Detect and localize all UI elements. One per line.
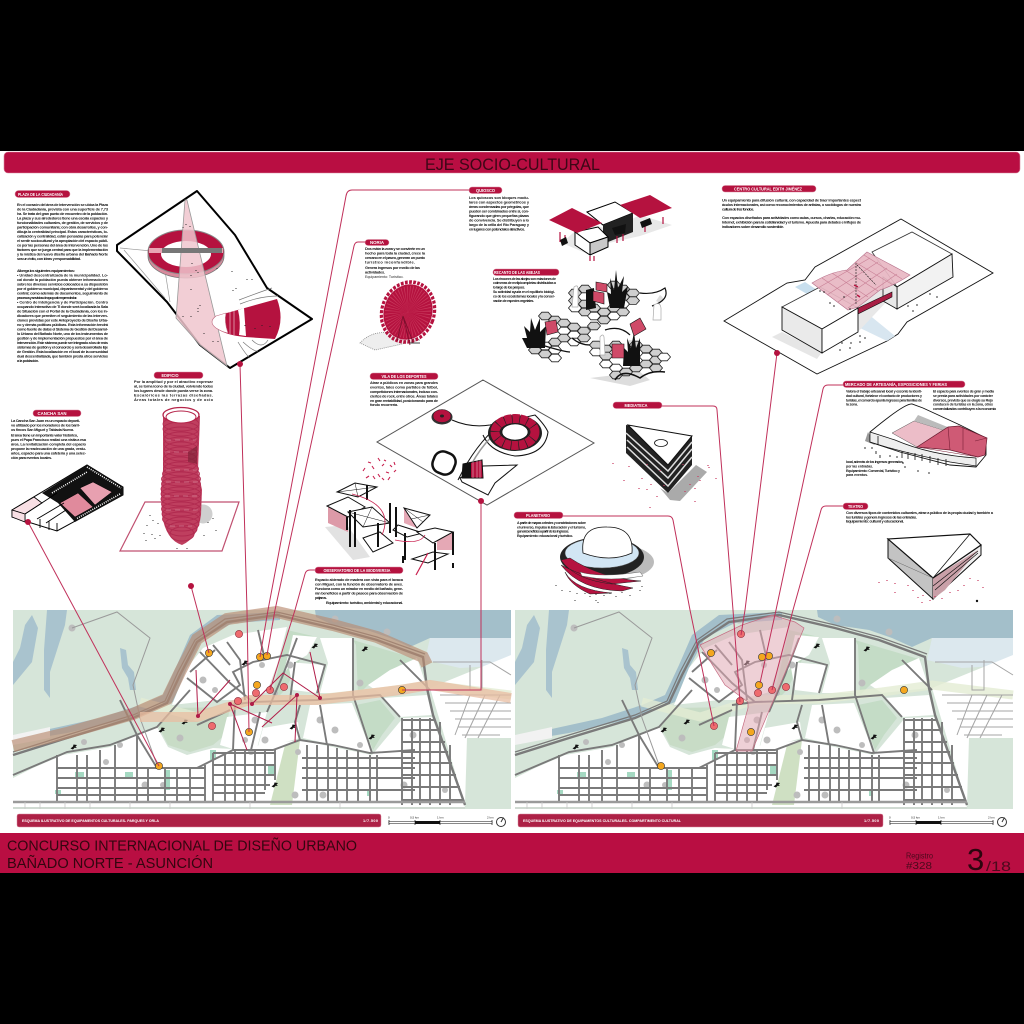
text: noria: turístico inconfundible.: [365, 260, 415, 264]
text: plaza: como fuente de datos el Sistema de Gestión del Desarrol-: [17, 326, 109, 332]
caption bar: parques y orla: [17, 814, 381, 827]
scale bar: right: 0,5 km: [911, 816, 921, 820]
text: recanto: lo largo de los parques.: [493, 286, 525, 290]
text: observatorio: Equipamiento: turístico, ambiental y educacional.: [326, 600, 403, 605]
text: observatorio: ran beneficios a partir de paseos para observación de: [315, 590, 404, 596]
text: noria: [365, 246, 426, 279]
text: quiosco: pueden ser combinados entre sí, con-: [469, 208, 530, 214]
panel: recanto de las abejas: [493, 269, 670, 386]
label: edificio: EDIFICIO: [162, 373, 179, 378]
text: quiosco: en lugares con potenciales atractivos.: [469, 226, 525, 232]
text: plaza: sea un éxito, con ideas y responsabilidad.: [17, 256, 81, 261]
map: compartimento cultural: [515, 610, 1013, 809]
text: mercado: local, además de los ingresos generados: [846, 460, 903, 464]
text: quiosco: de convivencia. Se distribuyen a lo: [469, 218, 530, 222]
footer band: BAÑADO NORTE - ASUNCIÓN: [7, 855, 213, 872]
text: plaza: [17, 202, 109, 363]
text: recanto: [493, 277, 557, 303]
label: planetario: PLANETARIO: [526, 513, 551, 518]
text: quiosco: [469, 195, 530, 232]
text: plaza: de la Ciudadanía, prevista con una superficie de 7,73: [17, 206, 109, 212]
text: cancha san: [11, 418, 87, 460]
text: mercado: dad cultural, fortalece el contacto de productores y: [846, 394, 922, 398]
text: vila: Atrae a públicos en zonas para grandes: [370, 380, 438, 385]
text: recanto: vación de especies vegetales.: [493, 299, 534, 303]
drawing: mercado: [865, 404, 987, 474]
text: edificio: Áreas totales de negocios y de ocio: [134, 397, 214, 402]
caption bar: compartimento cultural: [518, 814, 883, 827]
text: centro cultural: Internet, exhibición para la cotidianidad y el turismo. Apuesta para debates e influjos de: [722, 220, 862, 224]
text: plaza: La plaza y sus alrededores tiene una escala espacios y: [17, 216, 109, 220]
text: plaza: calización y centralidad, están pensadas para potenciar: [17, 234, 108, 238]
text: mercado: la zona.: [846, 402, 858, 406]
drawing: noria wheel: [360, 274, 443, 350]
text: planetario: el universo, impulsa la Educación y el turismo,: [517, 525, 586, 529]
text: cancha san: El área tiene un importante valor histórico,: [11, 432, 78, 438]
text: quiosco: lares con aspectos geométricos y: [469, 200, 530, 204]
text: cancha san: arios, espacio para una cafetería y una selec-: [11, 450, 87, 456]
text: vila: [370, 380, 439, 407]
text: mercado: Valora el trabajo artesanal local y esconte la identi-: [846, 390, 923, 394]
scale bar: right: 2 km: [988, 816, 995, 820]
text: mercado: El espacio para eventos de gran y media: [933, 390, 995, 394]
panel: quiosco: [469, 187, 672, 261]
label: vila: VILA DE LOS DEPORTES: [382, 374, 427, 379]
text: observatorio: Espacio abierado de madera con vista para el lavaca: [315, 577, 404, 582]
label: observatorio: OBSERVATORIO DE LA BIODIVERSIA: [324, 568, 391, 573]
label: recanto: [493, 269, 559, 276]
text: plaza: funcionalidades culturales, de gestión, de servicios y de: [17, 220, 109, 225]
label: teatro: TEATRO: [848, 504, 864, 509]
text: edificio: Por la amplitud y por el atractivo expresar: [134, 379, 213, 384]
text: recanto: co de los ecosistemas locales y la conser-: [493, 294, 556, 298]
text: mercado: Equipamiento: Comercial, Turístico y: [846, 469, 900, 473]
panel: centro cultural edith jimenez: [722, 186, 993, 374]
text: plaza: dual descentralizada, que también presta otros servicios: [17, 354, 108, 358]
text: mercado: por las entradas.: [846, 464, 873, 468]
scale bar: left: 1 km: [437, 816, 444, 820]
label: mediateca: MEDIATECA: [624, 403, 648, 408]
scale bar: left: [388, 816, 506, 826]
text: teatro: Con diversos tipos de contenidos culturales, atrae a público de la propia ciudad y también a: [846, 510, 994, 515]
drawing: cancha san: [12, 465, 123, 531]
text: plaza: lo Urbano del Bañado Norte, uno de los instrumentos de: [17, 331, 109, 336]
text: centro cultural: Con espacios diseñados para actividades como aulas, cursos, charlas, educación mu-: [722, 215, 862, 220]
scale bar: right: 1 km: [938, 816, 945, 820]
text: edificio: los lugares desde donde pueda verse la zona.: [134, 388, 213, 393]
dot: edificio callout: [188, 583, 194, 589]
text: centro cultural: [722, 198, 862, 229]
text: observatorio: [315, 577, 404, 605]
label: quiosco: QUIOSCO: [476, 188, 496, 193]
text: plaza: intervención. Este sistema puede ser integrado a los de más: [17, 340, 108, 345]
drawing: centro cultural: [724, 219, 993, 374]
text: plaza: el sentir sociocultural y la apropiación del espacio públi-: [17, 238, 109, 243]
text: noria: actividades.: [365, 270, 385, 274]
drawing: plaza: [117, 191, 312, 368]
text: mercado: conducen de turistas en la zona, otros: [933, 402, 993, 406]
text: planetario: Equipamiento: educacional y turístico.: [517, 534, 573, 538]
map: parques y orla: [13, 610, 511, 809]
text: plaza: ciones previstas por este Anteproyecto de Diseño Urba-: [17, 318, 109, 322]
panel: plaza de la ciudadania: [15, 190, 312, 368]
drawing: edificio tower: [120, 408, 239, 551]
text: vila: competiciones internacionales, incluso con-: [370, 389, 439, 394]
drawing: vila site plan: [377, 380, 594, 505]
text: mercado: [846, 390, 997, 477]
drawing: quiosco: [549, 195, 672, 261]
drawing: observatorio pavilions: [325, 458, 453, 575]
text: plaza: dibuja la centralidad principal. Estas características, lo-: [17, 229, 109, 234]
label: mercado: MERCADO DE ARTESANÍA, EXPOSICIONES Y FERIAS: [845, 382, 947, 387]
white sheet: [0, 151, 1024, 833]
scale bar: left: 0: [388, 816, 390, 820]
text: vila: eventos, tales como partidos de fútbol,: [370, 384, 438, 390]
text: cancha san: área. La revitalización completa del espacio: [11, 442, 87, 446]
panel: mediateca: [613, 402, 716, 508]
text: vila: en gran rentabilidad, posicionando para de: [370, 398, 439, 403]
text: plaza: a la población.: [17, 358, 39, 363]
text: noria: cercano en el paseo, generan un punto: [365, 255, 426, 260]
label: noria: NORIA: [370, 240, 384, 245]
panel: cancha san: [11, 410, 123, 531]
text: plaza: gestión y de implementación propuestos por el área de: [17, 336, 109, 340]
caption bar: parques y orla: ESQUEMA ILUSTRATIVO DE EQUIPAMENTOS CULTURALES- PARQUES Y ORLA: [22, 819, 159, 823]
text: plaza: cal donde la población pueda obtener informaciones: [17, 277, 108, 282]
scale bar: left: 2 km: [487, 816, 494, 820]
text: plaza: participación comunitaria; con obra desarrollos, y con-: [17, 224, 109, 230]
label: quiosco: [469, 187, 502, 194]
text: observatorio: pájaros.: [315, 595, 327, 600]
text: recanto: colmenas de melipicompletas distribuidas a: [493, 281, 557, 285]
footer band: #328: [906, 861, 933, 872]
panel: planetario: [514, 512, 654, 603]
text: plaza: sistemas de gestión y el consorcio y será desarrollado Eje: [17, 344, 109, 350]
text: cancha san: os fincos San Miguel y Tablada Nueva.: [11, 427, 74, 432]
text: plaza: dicadores que permiten el seguimiento de las interven-: [17, 313, 109, 318]
scale bar: left: 0,5 km: [410, 816, 420, 820]
text: centro cultural: cultura de tres fondos.: [722, 206, 754, 212]
scale bar: right: 0: [889, 816, 891, 820]
footer band: CONCURSO INTERNACIONAL DE DISEÑO URBANO: [7, 838, 357, 854]
label: centro cultural: [722, 186, 816, 192]
text: teatro: [846, 510, 994, 524]
panel: vila de los deportes: [370, 373, 594, 505]
text: quiosco: largo de la orilla del Río Paraguay y: [469, 222, 530, 227]
label: vila: [370, 373, 438, 380]
text: plaza: de Gestión. Esta localización en el local de la comunidad: [17, 349, 109, 354]
text: plaza: ha. Se trata del gran punto de encuentro de la población.: [17, 211, 108, 216]
text: plaza: factores que se juega central para que la implementación: [17, 247, 109, 252]
text: planetario: [517, 521, 586, 538]
footer band: Registro: [906, 852, 933, 860]
text: quiosco: figurando que giren pequeñas plazas: [469, 213, 529, 218]
title bar: [4, 152, 1020, 174]
label: plaza: PLAZA DE LA CIUDADANÍA: [18, 192, 63, 197]
text: recanto: Los rincones de las abejas son estaciones de: [493, 277, 556, 281]
text: cancha san: pues el Papa Francisco realizó una visita a esa: [11, 437, 87, 442]
drawing: planetario dome: [556, 527, 654, 603]
text: noria: Equipamiento: Turístico.: [365, 275, 404, 279]
scale bar: right: [889, 816, 1006, 826]
text: plaza: no y demás políticas públicas. Esta información tendrá: [17, 322, 109, 327]
title bar: EJE SOCIO-CULTURAL: [425, 155, 600, 174]
text: plaza: procesos y servicios de apoyo al emprendedor.: [17, 295, 77, 300]
text: mercado: se presta para actividades por carácter: [933, 394, 994, 398]
caption bar: parques y orla: 1/7.500: [363, 819, 378, 823]
label: edificio: [154, 372, 203, 378]
label: recanto: RECANTO DE LAS ABEJAS: [494, 270, 540, 275]
text: plaza: por el gobierno municipal, departamental y del gobierno: [17, 286, 109, 291]
text: noria: hecho para toda la ciudad, crece la: [365, 250, 426, 256]
label: cancha san: CANCHA SAN: [38, 411, 67, 416]
label: plaza: [15, 190, 70, 198]
text: observatorio: con Miguel, con la función de observatorio de aves.: [315, 582, 403, 586]
label: mercado: [843, 381, 965, 388]
footer band: [0, 833, 1024, 877]
text: edificio: al, se torna icono de la ciudad, volviendo todos: [134, 384, 213, 388]
text: mercado: para eventos.: [846, 473, 868, 477]
dot: cancha callout: [25, 519, 31, 525]
text: mercado: comercializadas contribuyen a la economía: [933, 407, 997, 411]
text: noria: Genera ingresos por medio de las: [365, 265, 420, 270]
text: quiosco: áreas condensadas por pérgolas, que: [469, 204, 530, 209]
label: centro cultural: CENTRO CULTURAL EDITH JIMÉNEZ: [734, 186, 802, 192]
panel: mercado de artesania: [843, 381, 997, 477]
text: mercado: turistas, el comercio apunta ingresos para familias de: [846, 398, 922, 402]
text: cancha san: propone la readecuación de una grada, vestu-: [11, 446, 87, 451]
text: plaza: y la mística del nuevo diseño urbano del Bañado Norte: [17, 252, 109, 256]
text: plaza: • Unidad descentralizada de la municipalidad. Lo-: [17, 272, 109, 278]
dot: vila callout: [478, 498, 484, 504]
text: vila: fondo recorrería.: [370, 402, 398, 407]
text: planetario: A partir de mapas celestes y constelaciones sobre: [517, 521, 586, 525]
text: edificio: Escalóricos las terrazas diseñadas.: [134, 392, 213, 398]
caption bar: compartimento cultural: 1/7.500: [864, 819, 879, 823]
text: plaza: central; como además de documentos, seguimiento de: [17, 290, 109, 296]
text: quiosco: Los quioscos son bloques modu-: [469, 195, 530, 200]
text: plaza: co por las personas del área de intervención. Uno de los: [17, 242, 108, 248]
footer band: /18: [986, 858, 1011, 874]
caption bar: compartimento cultural: ESQUEMA ILUSTRATIVO DE EQUIPAMENTOS CULTURALES- COMPARTIMENTO CULTURAL: [523, 819, 682, 823]
dot: plaza callout: [237, 361, 243, 367]
label: observatorio: [315, 567, 403, 574]
text: mercado: diversos, previsto que se elogie su Rojo: [933, 398, 994, 402]
text: centro cultural: áculos internacionales, así como reconocimientos de artistas, o sociólogos de nuestra: [722, 202, 862, 207]
text: centro cultural: indicadores sobre desarrollo sostenible.: [722, 224, 784, 229]
footer band: 3: [967, 842, 984, 877]
drawing: teatro: [879, 534, 983, 603]
text: teatro: los turistas y genera ingresos de las entradas.: [846, 514, 917, 520]
text: plaza: de Situación con el Portal de la Ciudadanía, con los in-: [17, 308, 109, 314]
text: cancha san: vo utilizado por los moradores de los barri-: [11, 422, 81, 428]
text: cancha san: ción para eventos locales.: [11, 455, 52, 460]
text: noria: Dos están la zona y se convierte en un: [365, 246, 426, 251]
panel: observatorio de la biodiversidad: [315, 458, 453, 605]
text: plaza: En el corazón del área de intervención se ubica la Plaza: [17, 202, 109, 207]
text: edificio: [134, 379, 214, 402]
panel: edificio: [120, 372, 239, 551]
dot: centro callout: [774, 350, 780, 356]
panel: noria: [360, 240, 443, 350]
panel: teatro: [843, 503, 994, 603]
text: plaza: Alberga los siguientes equipamientos:: [17, 268, 75, 273]
text: plaza: ocupando interactivo de TI donde será localizada la Sala: [17, 304, 109, 309]
text: centro cultural: Un equipamiento para difusión cultural, con capacidad de traer importantes espect: [722, 198, 862, 202]
callout lines: [28, 190, 843, 766]
drawing: mediateca block: [613, 425, 716, 508]
drawing: recanto hexagons: [522, 270, 670, 386]
text: teatro: Equipamiento: cultural y educacional.: [846, 518, 904, 524]
label: teatro: [843, 503, 868, 510]
text: plaza: • Centro de Inteligencia y de Participación. Centro: [17, 300, 109, 304]
text: plaza: sobre los diversos servicios colocados a su disposición: [17, 282, 109, 286]
text: recanto: Su actividad ayuda en el equilibrio biológi-: [493, 290, 556, 294]
text: observatorio: Funciona como un mirador en medio del bañado, gene-: [315, 586, 404, 591]
text: cancha san: La Cancha San Juan es un espacio deporti-: [11, 418, 81, 423]
text: planetario: genera beneficios a partir de los ingresos.: [517, 530, 569, 534]
text: vila: ciertos de rock, entre otros. Áreas totales: [370, 394, 438, 398]
